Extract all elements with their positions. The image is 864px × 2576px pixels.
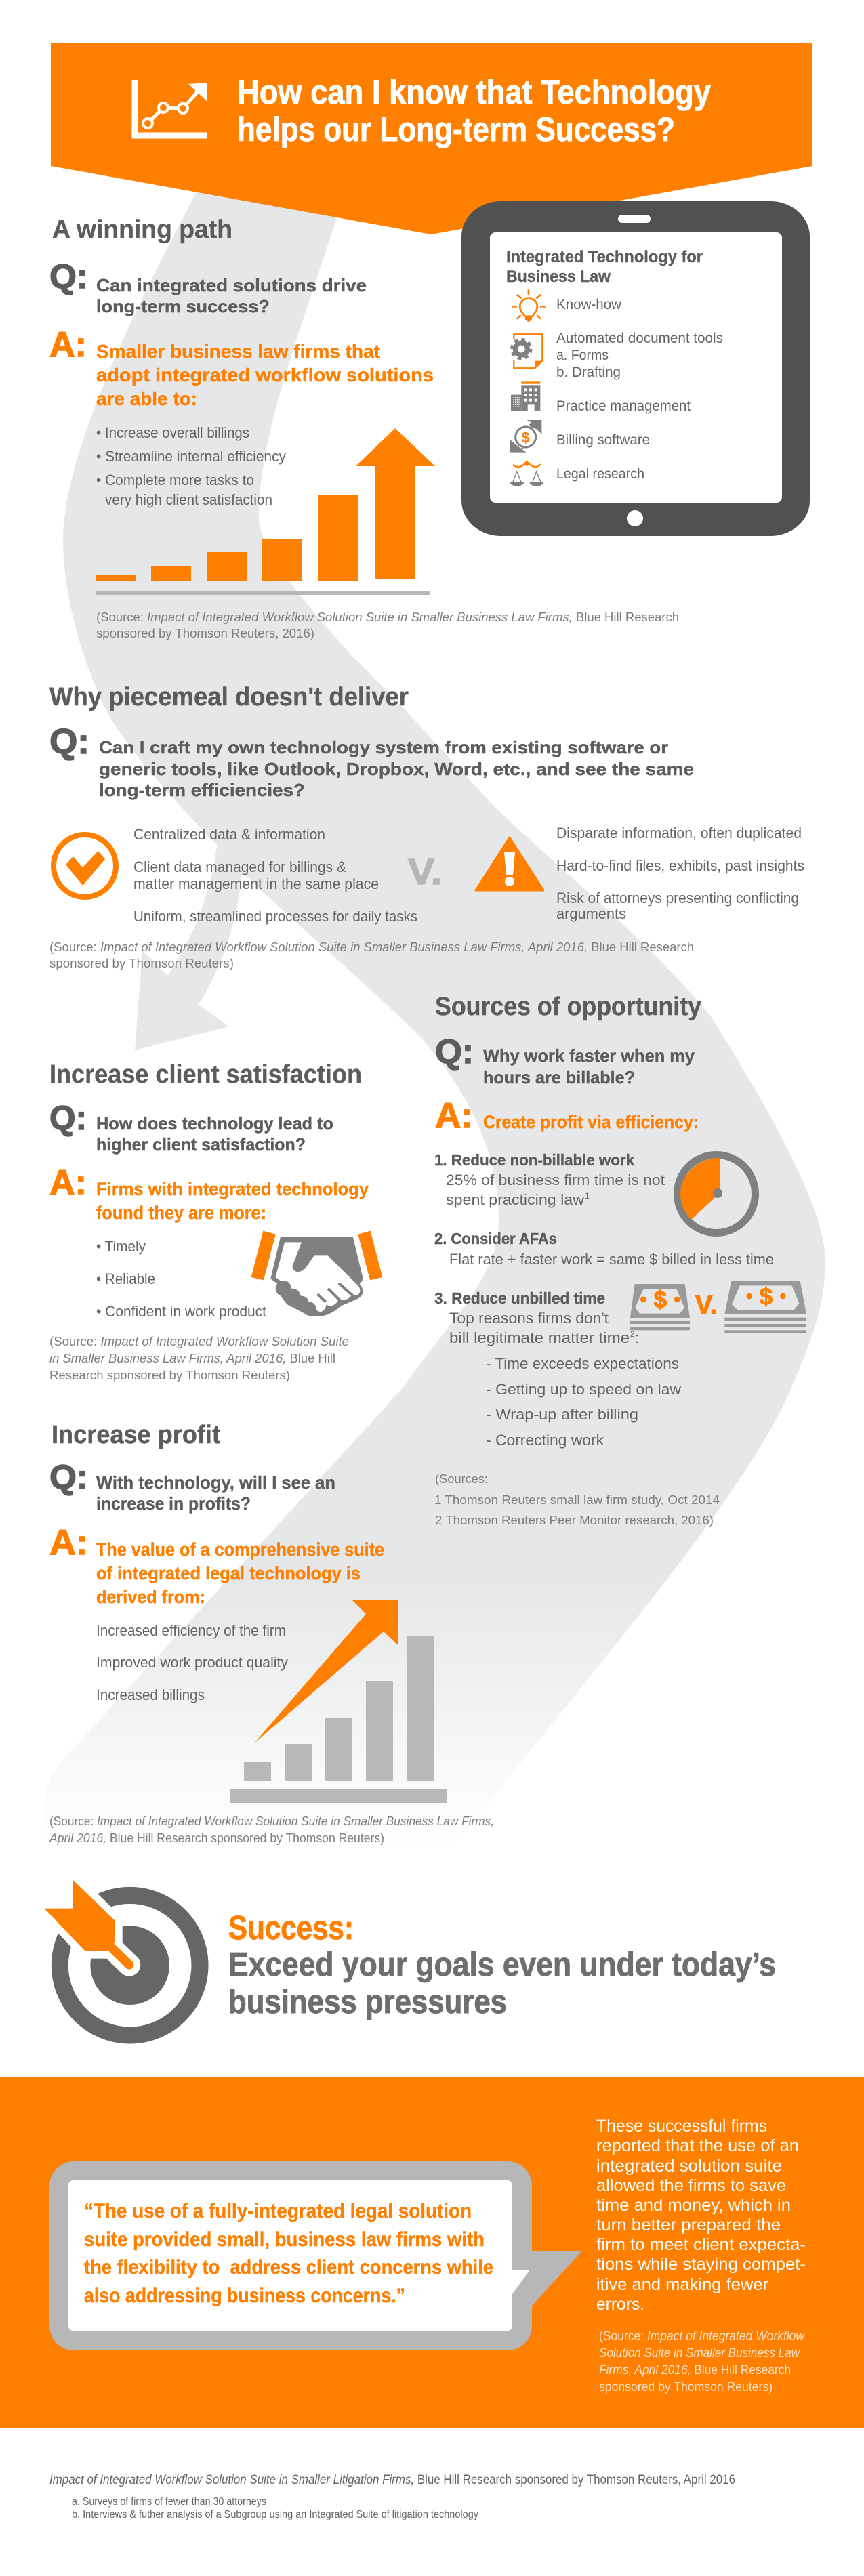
source note: sponsored by Thomson Reuters) (599, 2380, 773, 2394)
value list (96, 1622, 288, 1703)
integrated benefits list: matter management in the same place (133, 875, 379, 892)
tablet list text: Billing software (556, 432, 650, 448)
firms summary text: itive and making fewer (596, 2275, 768, 2294)
item 1: reduce non-billable work: 1 (585, 1191, 590, 1201)
answer: A: (435, 1096, 473, 1136)
panel: why piecemeal doesn't deliver (49, 683, 804, 970)
icon: billing arrows and dollar (510, 420, 541, 453)
icon: scales of justice (510, 460, 543, 486)
source note: (Source: Impact of Integrated Workflow Solution Suite in Smaller Business Law Firms, Blue Hill Research (96, 610, 679, 624)
bullet list: • Streamline internal efficiency (96, 448, 286, 465)
question: generic tools, like Outlook, Dropbox, Word, etc., and see the same (99, 759, 694, 779)
source note: (Source: Impact of Integrated Workflow Solution Suite in Smaller Business Law Firms, April 2016, Blue Hill Research (49, 940, 694, 954)
panel: tablet with technology list (461, 201, 810, 536)
answer: Create profit via efficiency: (483, 1112, 699, 1132)
source note (49, 940, 694, 970)
icon: clock with 25 percent wedge (678, 1155, 755, 1233)
answer: of integrated legal technology is (96, 1563, 361, 1583)
integrated benefits list: Client data managed for billings & (133, 858, 346, 875)
source note (49, 1335, 349, 1382)
success statement: business pressures (228, 1984, 507, 2020)
bullet list: • Increase overall billings (96, 424, 249, 441)
answer (49, 1523, 384, 1607)
firms summary text: firm to meet client expecta- (596, 2235, 806, 2254)
question (49, 257, 367, 316)
value list: Improved work product quality (96, 1654, 288, 1671)
source note: Solution Suite in Smaller Business Law (599, 2346, 800, 2361)
source note (434, 1472, 720, 1527)
heading: Why piecemeal doesn't deliver (49, 683, 409, 711)
tablet list text: Automated document tools (556, 331, 723, 346)
bar chart with rising arrow (230, 1600, 447, 1803)
bullet list: • Reliable (96, 1270, 155, 1287)
success statement: Exceed your goals even under today’s (228, 1947, 776, 1983)
answer: A: (49, 325, 87, 365)
panel: increase profit (49, 1421, 494, 1845)
heading: Increase profit (52, 1421, 220, 1449)
integrated benefits list (133, 826, 417, 925)
answer: adopt integrated workflow solutions (96, 365, 434, 386)
piecemeal drawbacks list: Hard-to-find files, exhibits, past insights (556, 857, 804, 874)
footer references (49, 2473, 735, 2520)
piecemeal drawbacks list: arguments (556, 905, 626, 922)
item 3: reduce unbilled time: - Time exceeds expectations (486, 1355, 679, 1372)
tablet list text: Legal research (556, 466, 644, 482)
item 3: reduce unbilled time: : (635, 1329, 639, 1346)
firms summary text: tions while staying compet- (596, 2255, 806, 2274)
answer (435, 1096, 699, 1136)
icon: money stacks comparison (630, 1281, 806, 1333)
panel: success (44, 1879, 776, 2035)
bar chart with arrow (96, 428, 435, 595)
title banner (51, 43, 812, 234)
question: Q: (49, 1458, 88, 1496)
heading: Sources of opportunity (435, 993, 701, 1021)
source note: 2 Thomson Reuters Peer Monitor research, 2016) (435, 1514, 714, 1527)
icon: light bulb (512, 289, 546, 322)
panel: sources of opportunity (434, 993, 806, 1527)
source note (49, 1814, 494, 1845)
firms summary text: allowed the firms to save (596, 2176, 786, 2195)
source note: (Source: Impact of Integrated Workflow (599, 2329, 805, 2344)
tablet list text (556, 297, 723, 482)
title text: helps our Long-term Success? (237, 110, 675, 148)
source note: sponsored by Thomson Reuters, 2016) (96, 627, 314, 640)
icon: target with arrow (44, 1879, 200, 2035)
question: Why work faster when my (483, 1045, 695, 1066)
item 3: reduce unbilled time (434, 1289, 681, 1449)
panel: a winning path (49, 215, 679, 640)
question: How does technology lead to (96, 1113, 333, 1134)
tablet list text: Practice management (556, 398, 691, 414)
item 3: reduce unbilled time: bill legitimate matter time (449, 1329, 630, 1346)
value list: Increased billings (96, 1686, 205, 1703)
piecemeal drawbacks list (556, 825, 804, 922)
tablet list text: Know-how (556, 297, 622, 312)
item 1: reduce non-billable work: 1. Reduce non-billable work (434, 1151, 634, 1169)
footer references: Impact of Integrated Workflow Solution Suite in Smaller Litigation Firms, Blue Hill Research sponsored by Thomson Reuters, April 2016 (49, 2473, 735, 2487)
firms summary text: reported that the use of an (596, 2136, 799, 2155)
firms summary text: errors. (596, 2295, 644, 2314)
answer: The value of a comprehensive suite (96, 1539, 384, 1560)
firms summary text: These successful firms (596, 2117, 767, 2136)
question: Q: (49, 722, 89, 762)
bullet list: • Confident in work product (96, 1303, 266, 1320)
question: Can I craft my own technology system from existing software or (99, 737, 668, 757)
heading: Increase client satisfaction (49, 1060, 362, 1089)
speech bubble quote (49, 2161, 582, 2350)
answer (49, 1163, 369, 1223)
icon: office building (511, 381, 540, 411)
speech bubble quote: the flexibility to address client concerns while (84, 2256, 493, 2279)
source note: in Smaller Business Law Firms, April 2016, Blue Hill (49, 1352, 335, 1365)
piecemeal drawbacks list: Risk of attorneys presenting conflicting (556, 890, 799, 907)
question: Can integrated solutions drive (96, 275, 367, 295)
answer: found they are more: (96, 1203, 266, 1223)
question: increase in profits? (96, 1493, 251, 1514)
item 3: reduce unbilled time: Top reasons firms don't (449, 1310, 609, 1327)
bullet list: very high client satisfaction (105, 491, 272, 508)
item 2: consider AFAs: Flat rate + faster work = same $ billed in less time (449, 1251, 774, 1268)
source note: (Source: Impact of Integrated Workflow Solution Suite (49, 1335, 349, 1348)
item 2: consider AFAs (434, 1230, 774, 1268)
value list: Increased efficiency of the firm (96, 1622, 286, 1639)
tablet list text: a. Forms (556, 348, 609, 363)
icon: check mark circle (54, 835, 116, 897)
question: Q: (49, 1099, 87, 1137)
question (49, 1458, 335, 1514)
bullet list: • Timely (96, 1238, 146, 1255)
answer (49, 325, 434, 409)
tablet list text: b. Drafting (556, 365, 621, 380)
background path ribbon with arrow (45, 163, 825, 1877)
source note: Firms, April 2016, Blue Hill Research (599, 2363, 791, 2377)
heading: A winning path (52, 215, 232, 244)
question: higher client satisfaction? (96, 1134, 306, 1155)
item 3: reduce unbilled time: - Correcting work (486, 1432, 604, 1449)
source note (96, 610, 679, 640)
speech bubble quote: “The use of a fully-integrated legal solution (84, 2200, 472, 2222)
success heading: Success: (228, 1910, 354, 1947)
speech bubble quote: suite provided small, business law firms with (84, 2228, 485, 2251)
question: Q: (49, 257, 88, 295)
source note: 1 Thomson Reuters small law firm study, Oct 2014 (434, 1493, 720, 1507)
tablet heading (506, 248, 703, 286)
icon: money stacks comparison: $ (760, 1283, 773, 1310)
source note: April 2016, Blue Hill Research sponsored by Thomson Reuters) (49, 1831, 384, 1845)
question: Q: (435, 1033, 474, 1071)
footer references: a. Surveys of firms of fewer than 30 attorneys (72, 2496, 266, 2508)
answer: A: (49, 1523, 88, 1562)
question: long-term success? (96, 296, 270, 316)
item 3: reduce unbilled time: - Getting up to speed on law (486, 1381, 681, 1398)
tablet heading: Business Law (506, 268, 611, 286)
icon: billing arrows and dollar: $ (522, 429, 530, 446)
integrated benefits list: Uniform, streamlined processes for daily tasks (133, 908, 417, 925)
item 1: reduce non-billable work: spent practicing law (446, 1191, 584, 1208)
integrated benefits list: Centralized data & information (133, 826, 325, 843)
speech bubble quote: also addressing business concerns.” (84, 2285, 405, 2307)
footer references: b. Interviews & futher analysis of a Subgroup using an Integrated Suite of litigation technology (72, 2509, 478, 2520)
source note: sponsored by Thomson Reuters) (49, 957, 234, 970)
question (49, 1099, 333, 1155)
icon: document with gear (512, 334, 542, 368)
icon: warning triangle (476, 837, 543, 890)
title text (237, 73, 711, 148)
firms summary text: time and money, which in (596, 2196, 791, 2215)
question: hours are billable? (483, 1067, 635, 1087)
answer: are able to: (96, 388, 197, 409)
question (49, 722, 694, 800)
item 2: consider AFAs: 2. Consider AFAs (434, 1230, 557, 1247)
panel: increase client satisfaction (49, 1060, 382, 1382)
answer: Firms with integrated technology (96, 1179, 369, 1199)
bullet list: • Complete more tasks to (96, 472, 254, 489)
icon: handshake (251, 1231, 382, 1316)
firms summary text: turn better prepared the (596, 2216, 781, 2235)
icon: money stacks comparison: V. (695, 1291, 717, 1320)
title text: How can I know that Technology (237, 73, 711, 111)
tablet heading: Integrated Technology for (506, 248, 703, 266)
item 1: reduce non-billable work: 25% of business firm time is not (446, 1171, 665, 1188)
firms summary text (596, 2117, 806, 2314)
versus mark: V. (408, 852, 442, 892)
success statement (228, 1947, 776, 2020)
source note: (Source: Impact of Integrated Workflow Solution Suite in Smaller Business Law Firms, (49, 1814, 494, 1828)
source note: Research sponsored by Thomson Reuters) (49, 1369, 290, 1382)
piecemeal drawbacks list: Disparate information, often duplicated (556, 825, 802, 842)
source note (599, 2329, 805, 2394)
item 3: reduce unbilled time: - Wrap-up after billing (486, 1406, 638, 1423)
item 1: reduce non-billable work (434, 1151, 665, 1208)
item 3: reduce unbilled time: 2 (630, 1329, 635, 1339)
answer: derived from: (96, 1587, 205, 1607)
firms summary text: integrated solution suite (596, 2157, 782, 2176)
question: long-term efficiencies? (99, 780, 305, 800)
question: With technology, will I see an (96, 1472, 335, 1493)
panel: orange quote band (0, 2077, 864, 2428)
bullet list (96, 424, 286, 508)
icon: money stacks comparison: $ (654, 1287, 667, 1313)
item 3: reduce unbilled time: 3. Reduce unbilled time (434, 1289, 605, 1307)
answer: Smaller business law firms that (96, 341, 380, 362)
icon: rising line chart (135, 80, 207, 136)
question (435, 1033, 695, 1087)
bullet list (96, 1238, 266, 1320)
answer: A: (49, 1163, 87, 1203)
source note: (Sources: (435, 1472, 488, 1486)
